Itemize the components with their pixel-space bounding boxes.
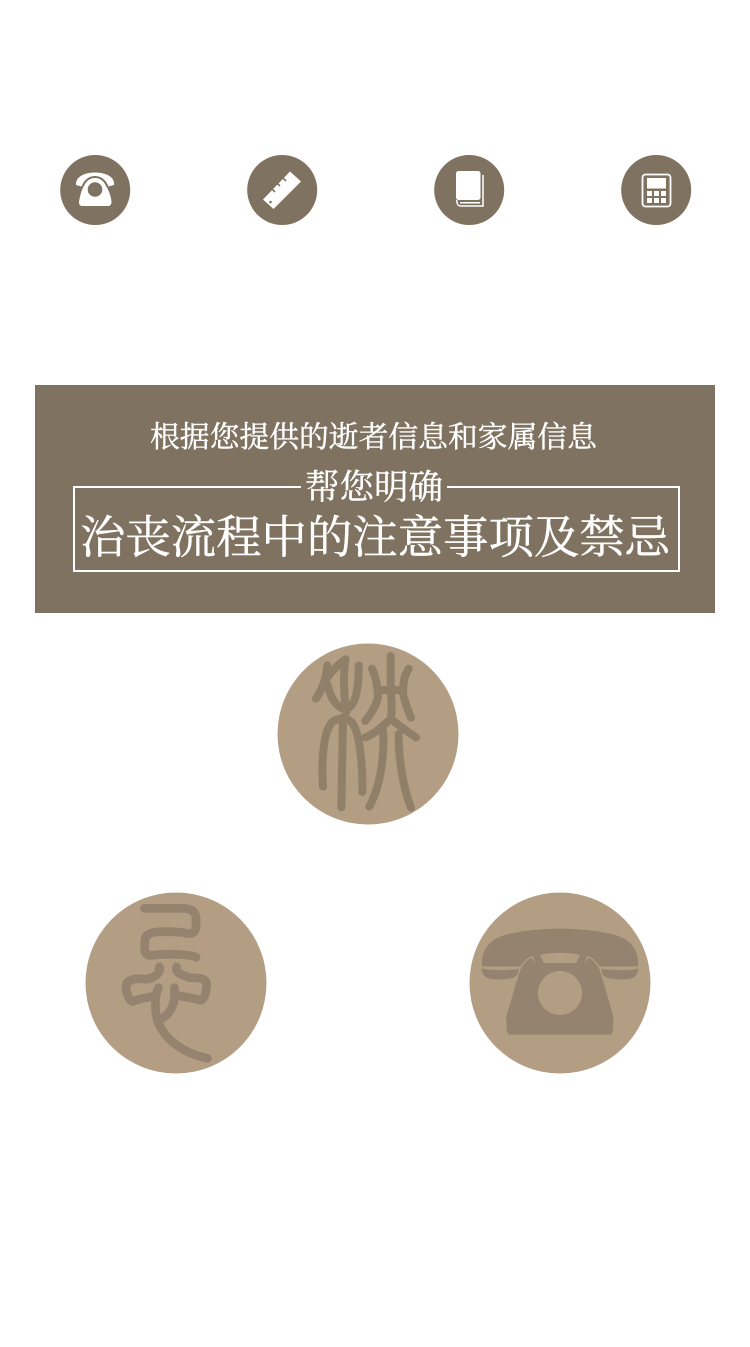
text: banner headline: 治丧流程中的注意事项及禁忌 [80,513,670,563]
icon: calculator [621,155,691,225]
text: banner line two: 帮您明确 [305,469,443,507]
text: banner line one: 根据您提供的逝者信息和家属信息 [150,421,597,454]
icon: ruler [247,155,317,225]
icon: large telephone [470,892,650,1074]
seal: autumn character [278,644,458,824]
icon: telephone [60,155,130,225]
panel: banner background [35,385,715,613]
icon: book [434,155,504,225]
banner frame [74,487,679,571]
seal: taboo character [86,892,266,1074]
